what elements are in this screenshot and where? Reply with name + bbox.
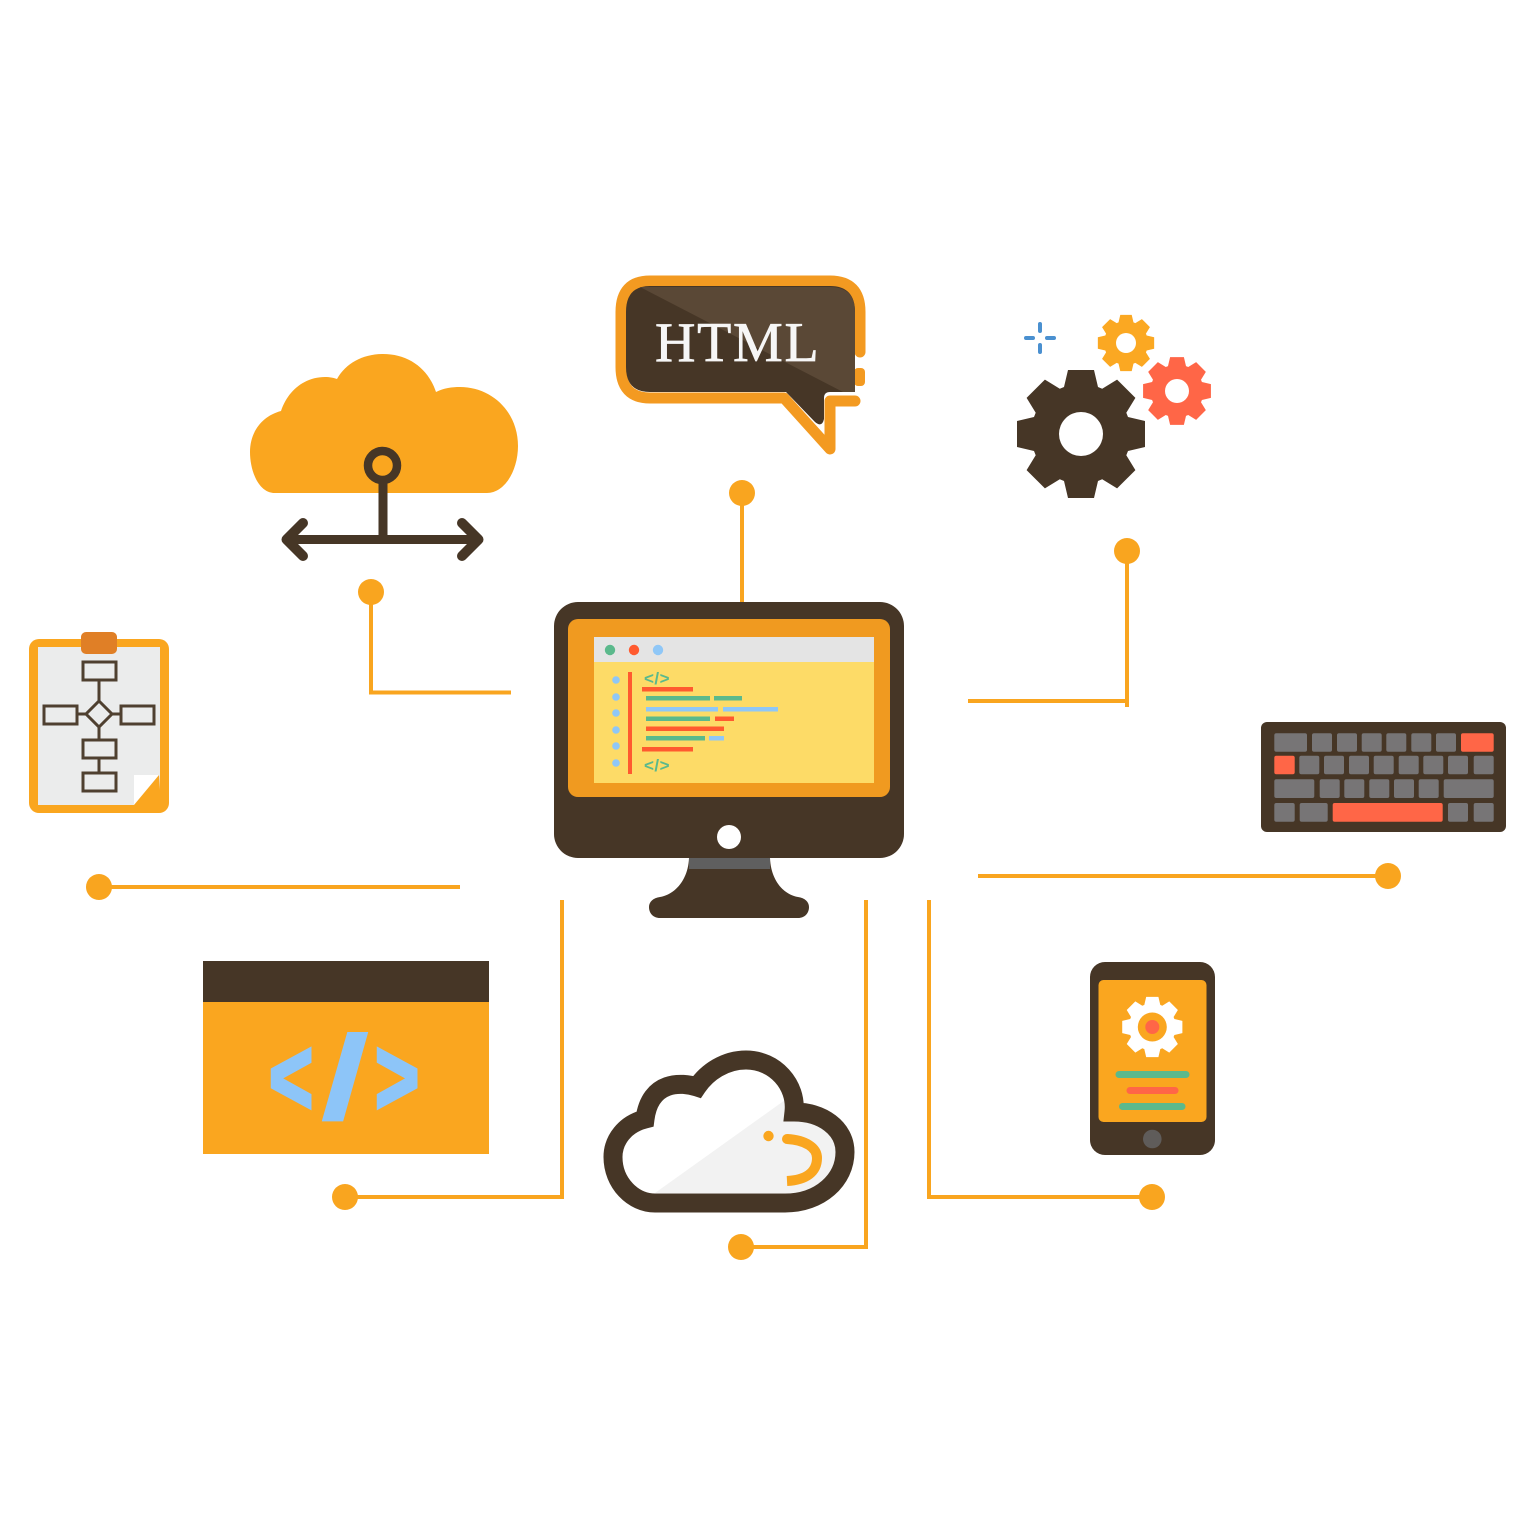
window body xyxy=(203,961,489,1154)
connector: outline cloud to monitor xyxy=(728,900,866,1260)
connector: code window to monitor xyxy=(332,900,562,1210)
sparkle xyxy=(1026,324,1054,352)
code symbol: / xyxy=(320,1012,370,1145)
small orange gear xyxy=(1098,315,1154,371)
icon: code window xyxy=(203,961,489,1154)
power button xyxy=(717,825,741,849)
editor gutter xyxy=(612,672,632,774)
code tag bottom: </> xyxy=(644,756,670,775)
medium red gear xyxy=(1143,357,1211,425)
code tag top: </> xyxy=(644,669,670,688)
editor title bar xyxy=(594,637,874,662)
bubble fill xyxy=(626,286,855,424)
connector: gears to monitor xyxy=(968,538,1140,707)
tablet body xyxy=(1090,962,1215,1155)
connector: HTML bubble to monitor xyxy=(729,480,755,603)
icon: outline cloud xyxy=(613,1060,845,1203)
clipboard board xyxy=(29,639,169,813)
cloud shape xyxy=(250,354,518,493)
cloud interior xyxy=(613,1060,845,1203)
status lines xyxy=(1119,1074,1186,1106)
paper sheet xyxy=(38,647,160,805)
settings gear xyxy=(1122,997,1182,1057)
corner triangle xyxy=(134,775,161,805)
icon: HTML speech bubble xyxy=(621,281,865,449)
connector: clipboard to monitor xyxy=(86,874,460,900)
bubble highlight xyxy=(640,287,855,392)
orange dot xyxy=(763,1131,774,1141)
bubble outline fragment xyxy=(854,368,865,386)
connector: tablet to monitor xyxy=(929,900,1165,1210)
cloud shading xyxy=(655,1100,845,1193)
orange arc xyxy=(782,1134,817,1181)
key row 2 xyxy=(1274,756,1494,774)
code symbol: > xyxy=(375,1017,419,1137)
stand neck shadow xyxy=(689,858,770,869)
window header xyxy=(203,961,489,1002)
code symbol: < xyxy=(269,1017,313,1137)
editor background xyxy=(594,637,874,783)
key row 1 xyxy=(1274,733,1494,752)
icon: tablet xyxy=(1090,962,1215,1155)
monitor body xyxy=(554,602,904,858)
HTML label: HTML xyxy=(655,312,820,374)
clip xyxy=(81,632,117,654)
monitor stand xyxy=(649,858,809,918)
home button xyxy=(1143,1130,1162,1148)
icon: network cloud xyxy=(250,354,518,556)
large brown gear xyxy=(1017,370,1145,498)
icon: monitor with code editor xyxy=(554,602,904,918)
screen bezel xyxy=(568,619,890,797)
tablet screen xyxy=(1098,980,1206,1122)
connector: network cloud to monitor xyxy=(358,579,511,692)
icon: keyboard xyxy=(1261,722,1506,832)
icon: gears xyxy=(1017,315,1211,498)
paper fold xyxy=(134,775,159,805)
flowchart xyxy=(44,662,154,791)
network node and arrows xyxy=(286,451,478,556)
key row 4 with space bar xyxy=(1274,803,1494,822)
key row 3 xyxy=(1274,779,1494,798)
cloud outline xyxy=(613,1060,845,1203)
code lines xyxy=(642,687,778,752)
icon: flowchart clipboard xyxy=(29,632,169,813)
bubble outline xyxy=(621,281,860,449)
connector: keyboard to monitor xyxy=(978,863,1401,889)
code symbol xyxy=(269,1012,419,1145)
keyboard body xyxy=(1261,722,1506,832)
